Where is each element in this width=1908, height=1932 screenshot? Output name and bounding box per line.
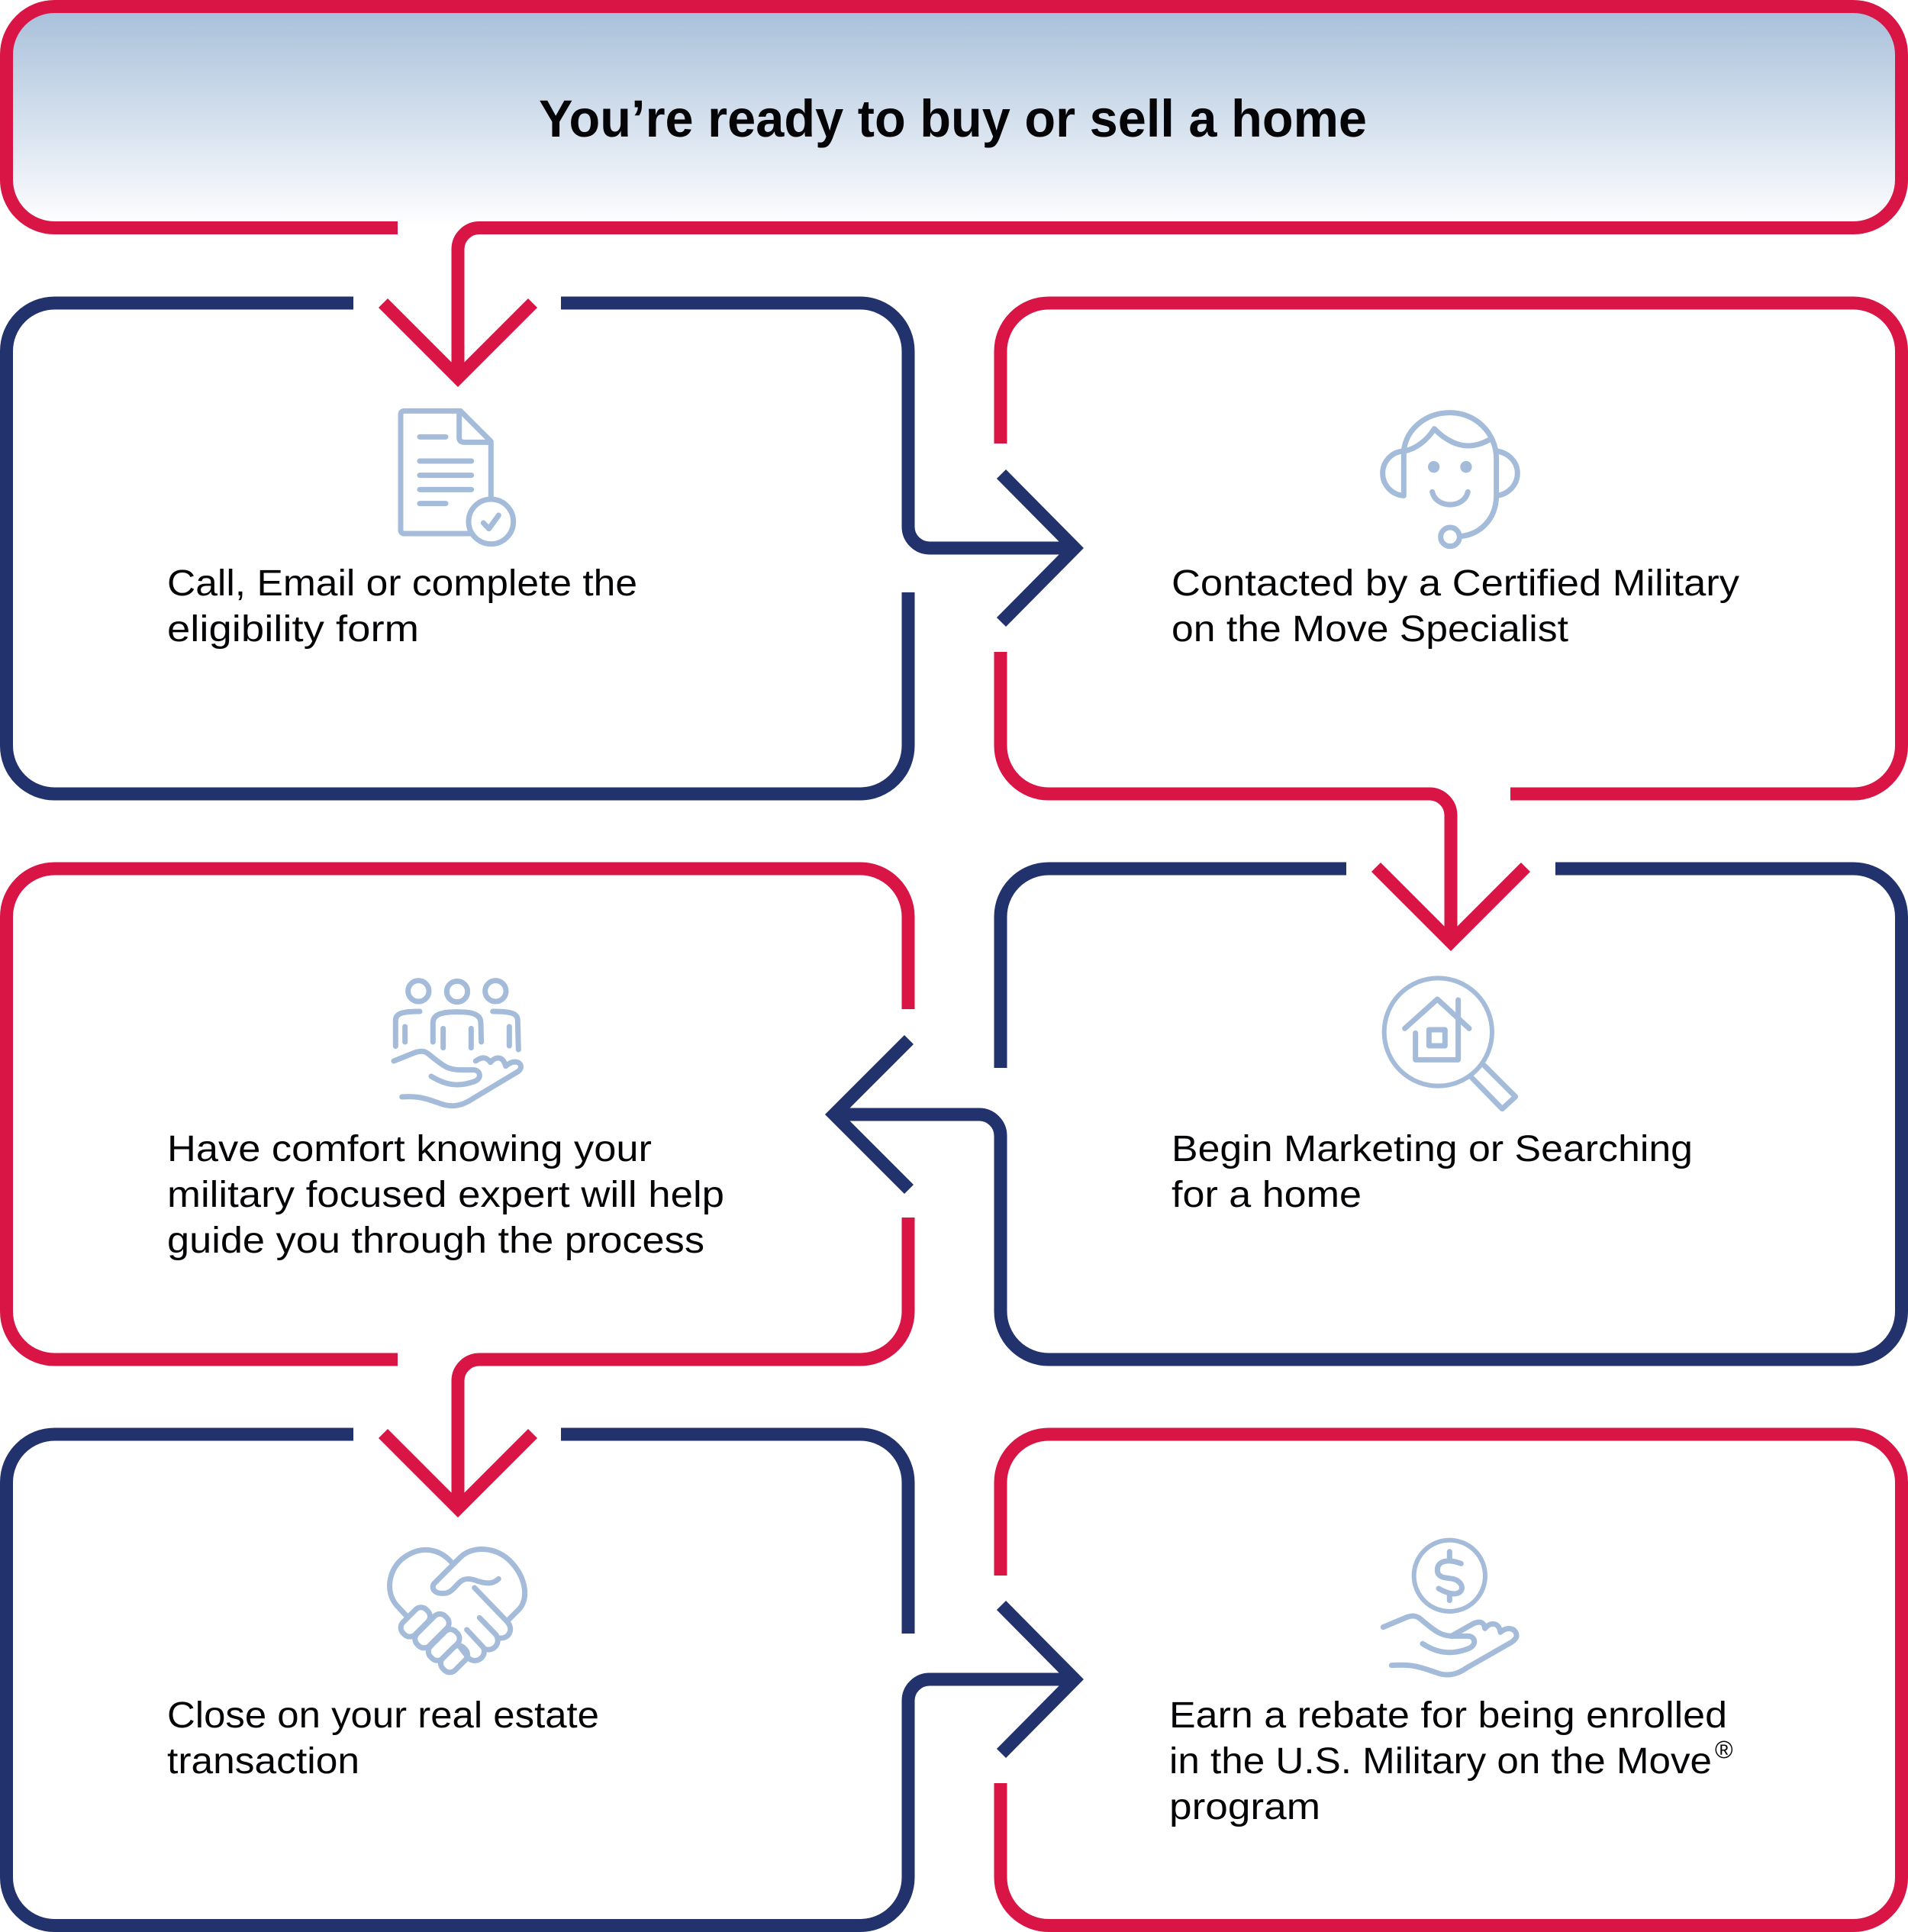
step 4 outline bbox=[6, 869, 908, 1507]
banner gradient fill bbox=[6, 6, 1902, 227]
step 3 text: Begin Marketing or Searching bbox=[1172, 1129, 1693, 1169]
step 5 text bbox=[167, 1695, 599, 1782]
heading: You’re ready to buy or sell a home bbox=[539, 89, 1367, 148]
step 6 text: program bbox=[1169, 1787, 1320, 1827]
panel: step 5 close transaction bbox=[6, 1434, 1067, 1925]
panel: step 6 earn rebate bbox=[1001, 1434, 1902, 1925]
icon: handshake heart bbox=[390, 1549, 525, 1676]
panel: start banner bbox=[6, 6, 1902, 374]
step 1 text: Call, Email or complete the bbox=[167, 563, 637, 604]
step 6 text: in the U.S. Military on the Move bbox=[1169, 1741, 1712, 1782]
step 1 text bbox=[167, 563, 637, 650]
step 6 text: ® bbox=[1715, 1736, 1733, 1763]
step 2 text bbox=[1172, 563, 1739, 650]
step 3 outline bbox=[836, 869, 1902, 1359]
arrow: step 2 to step 3 bbox=[1376, 867, 1526, 942]
arrow: step 3 to step 4 bbox=[834, 1040, 909, 1189]
step 4 text: military focused expert will help bbox=[167, 1175, 724, 1215]
icon: document with check bbox=[401, 411, 514, 544]
icon: coin over open hand bbox=[1383, 1540, 1516, 1675]
step 2 text: Contacted by a Certified Military bbox=[1172, 563, 1739, 604]
panel: step 3 marketing or searching bbox=[836, 869, 1902, 1359]
step 3 text bbox=[1172, 1129, 1693, 1215]
step 6 text bbox=[1169, 1695, 1733, 1827]
step 5 text: transaction bbox=[167, 1741, 359, 1782]
step 6 text: Earn a rebate for being enrolled bbox=[1169, 1695, 1727, 1736]
arrow: banner to step 1 bbox=[383, 303, 533, 378]
arrow: step 4 to step 5 bbox=[383, 1434, 533, 1508]
panel: step 4 expert guidance bbox=[6, 869, 908, 1507]
icon: house in magnifier bbox=[1384, 978, 1516, 1109]
icon: support agent headset bbox=[1383, 413, 1517, 547]
step 1 text: eligibility form bbox=[167, 609, 419, 650]
panel: step 2 specialist contact bbox=[1001, 303, 1902, 939]
arrow: step 1 to step 2 bbox=[561, 303, 1075, 622]
step 2 outline bbox=[1001, 303, 1902, 939]
step 3 text: for a home bbox=[1172, 1175, 1362, 1215]
step 1 outline bbox=[6, 303, 908, 794]
step 6 outline bbox=[1001, 1434, 1902, 1925]
icon: three people on open hand bbox=[394, 981, 521, 1106]
step 5 text: Close on your real estate bbox=[167, 1695, 599, 1736]
banner outline with arrow tail bbox=[6, 6, 1902, 374]
step 4 text bbox=[167, 1129, 724, 1261]
panel: step 1 call, email or form bbox=[6, 303, 908, 794]
step 4 text: Have comfort knowing your bbox=[167, 1129, 652, 1169]
step 5 outline bbox=[6, 1434, 1067, 1925]
step 2 text: on the Move Specialist bbox=[1172, 609, 1568, 650]
arrow: step 5 to step 6 bbox=[1001, 1605, 1075, 1753]
step 4 text: guide you through the process bbox=[167, 1221, 704, 1261]
